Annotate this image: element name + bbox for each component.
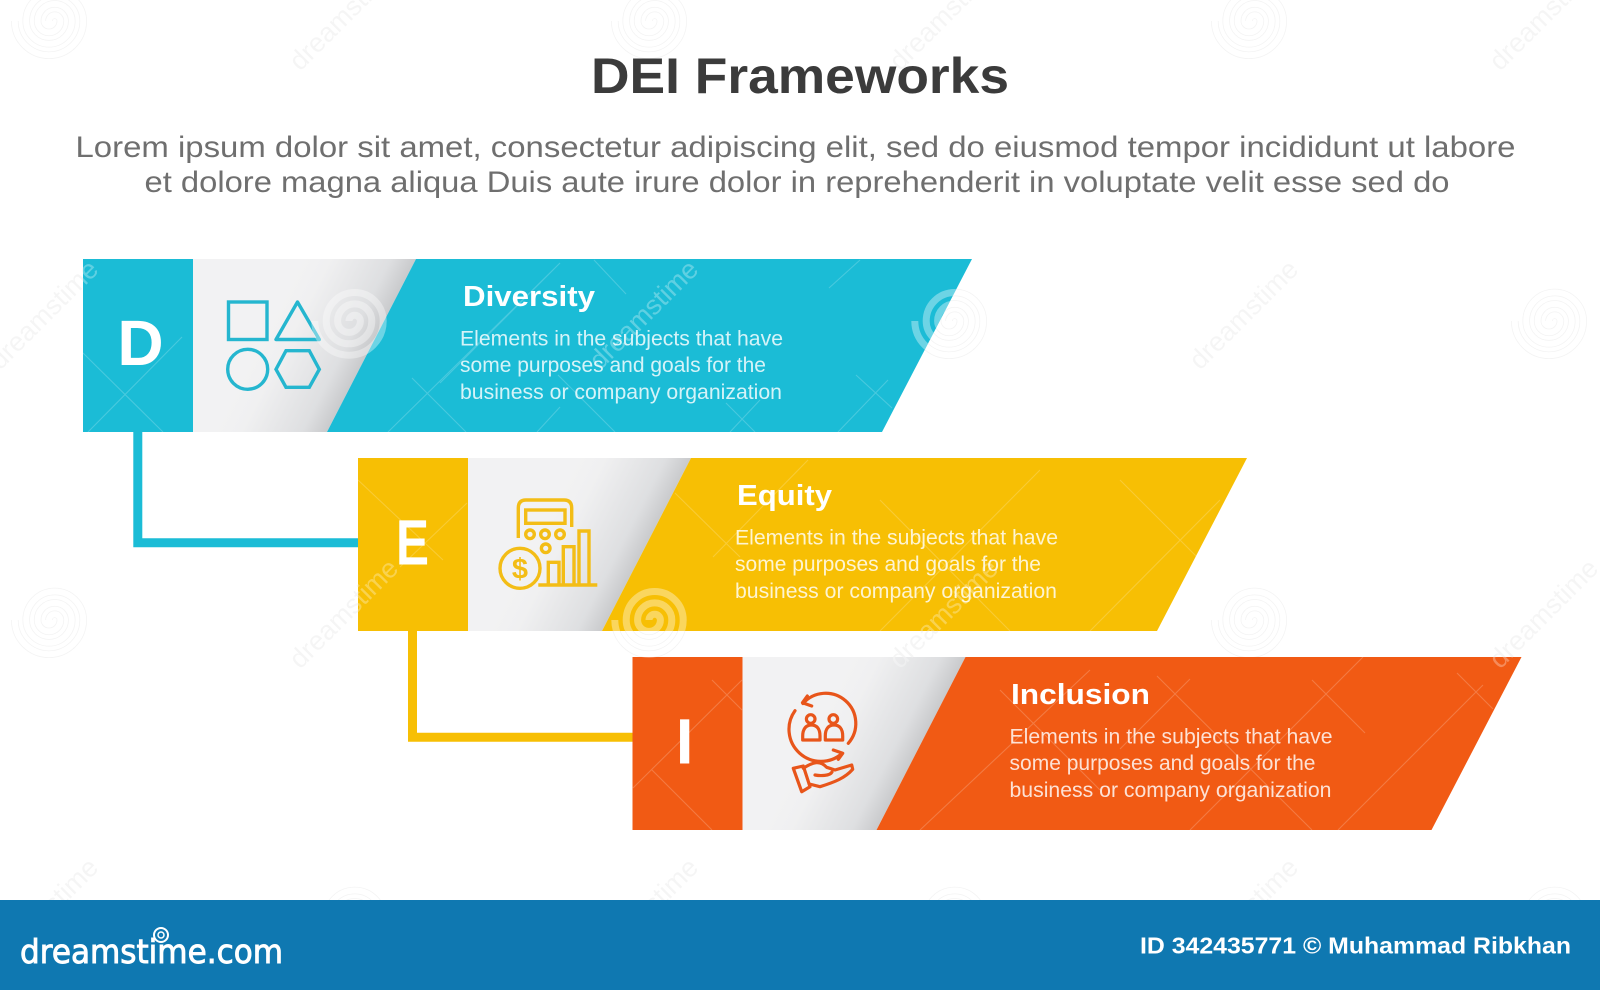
icon background: [193, 259, 416, 432]
description: Elements in the subjects that have: [735, 526, 1058, 550]
heading: Diversity: Diversity: [463, 281, 595, 313]
description: Elements in the subjects that have: [460, 326, 783, 350]
description: [460, 326, 783, 404]
colour banner: [327, 259, 972, 432]
letter D: D: [117, 307, 164, 379]
colour banner: [876, 657, 1522, 830]
watermark on white background: dreamstime: [1183, 852, 1304, 973]
description: business or company organization: [1010, 778, 1332, 802]
panel: Diversity: [83, 259, 972, 432]
heading: Inclusion: Inclusion: [1011, 679, 1150, 711]
icon: shapes: [228, 302, 319, 389]
subtitle text: [76, 131, 1516, 199]
icon background: [742, 657, 966, 830]
panel: Equity: [358, 458, 1247, 631]
panel: Inclusion: [632, 657, 1522, 830]
description: some purposes and goals for the: [1010, 751, 1316, 775]
watermark on white background: dreamstime: [1183, 254, 1304, 375]
icon background: [468, 458, 691, 631]
connector: D to E: [138, 432, 358, 543]
watermark on white background: dreamstime: [583, 852, 704, 973]
watermark on white background: dreamstime: [283, 553, 404, 674]
watermark on white background: dreamstime: [883, 553, 1004, 674]
description: some purposes and goals for the: [460, 353, 766, 377]
title: DEI Frameworks: [591, 48, 1009, 104]
description: [735, 526, 1058, 603]
footer credit: ID 342435771 © Muhammad Ribkhan: [1140, 932, 1571, 958]
icon: calculator, coin and bars: $: [512, 554, 528, 586]
colour banner: [602, 458, 1247, 631]
letter box I: [632, 657, 742, 830]
heading: Equity: Equity: [737, 480, 832, 512]
letter box D: [83, 259, 193, 432]
subtitle text: Lorem ipsum dolor sit amet, consectetur adipiscing elit, sed do eiusmod tempor incididunt ut labore: [76, 131, 1516, 164]
description: some purposes and goals for the: [735, 552, 1041, 576]
subtitle text: et dolore magna aliqua Duis aute irure dolor in reprehenderit in voluptate velit esse sed do: [144, 166, 1450, 199]
description: business or company organization: [735, 579, 1057, 603]
letter I: I: [676, 706, 694, 778]
watermark over panels: dreamstime: [583, 254, 704, 375]
description: Elements in the subjects that have: [1010, 724, 1332, 748]
description: business or company organization: [460, 380, 782, 404]
description: [1010, 724, 1332, 802]
icon: people in cycle over hand: [789, 693, 856, 792]
letter box E: [358, 458, 468, 631]
icon: calculator, coin and bars: [500, 500, 597, 588]
connector: E to I: [412, 631, 632, 737]
footer logo: dreamstime.com: [20, 932, 283, 971]
watermark over panels: [83, 260, 1513, 830]
letter E: E: [396, 506, 429, 578]
footer bar: [0, 900, 1600, 990]
watermark over panels: dreamstime: [283, 553, 404, 674]
watermark on white background: dreamstime: [583, 254, 704, 375]
watermark over panels: dreamstime: [883, 553, 1004, 674]
